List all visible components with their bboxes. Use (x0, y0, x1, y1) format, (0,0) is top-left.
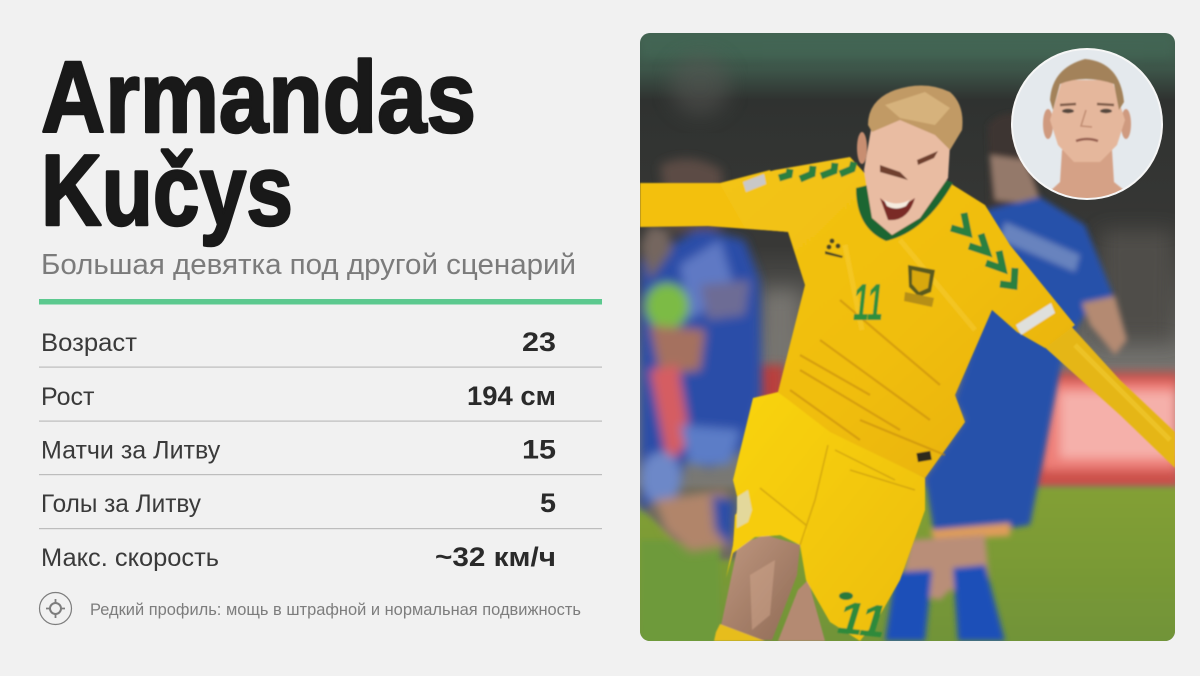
red advertising board (755, 365, 1180, 488)
row: height: 194 см (467, 381, 556, 411)
row: goals for Lithuania: Голы за Литву (41, 490, 201, 518)
row: matches for Lithuania (41, 434, 556, 464)
hummel logo (825, 238, 843, 258)
shorts crest (737, 490, 752, 528)
portrait hair (1050, 59, 1124, 110)
shirt hem label (916, 451, 932, 462)
photo background stands (640, 33, 1175, 641)
title: player name: Kučys (41, 135, 293, 247)
row: height: Рост (41, 383, 95, 411)
panel: match photo (630, 33, 1190, 657)
background player: left (640, 159, 762, 552)
shoulder chevrons (779, 162, 1015, 286)
row: top speed (41, 542, 556, 572)
row: matches for Lithuania: 15 (522, 434, 556, 464)
stats table (39, 327, 602, 572)
left arm (640, 170, 790, 232)
row: age (41, 327, 556, 357)
row: height (41, 381, 556, 411)
pitch (640, 484, 1175, 641)
portrait face (1050, 80, 1125, 162)
legs (714, 535, 825, 641)
shorts (726, 392, 925, 648)
footnote: Редкий профиль: мощь в штрафной и нормальная подвижность (90, 601, 581, 619)
shirt (720, 157, 1075, 478)
background player: right (885, 114, 1127, 641)
main player (640, 85, 1175, 648)
neck and collar (856, 178, 953, 241)
icon: target (40, 592, 72, 624)
head (857, 85, 962, 235)
right arm (1040, 325, 1175, 468)
row: top speed: Макс. скорость (41, 544, 219, 572)
row: goals for Lithuania (41, 488, 556, 518)
crest (904, 265, 935, 307)
portrait ears (1043, 109, 1053, 139)
sleeve badges (743, 174, 766, 192)
row: age: Возраст (41, 329, 138, 357)
row: age: 23 (522, 327, 556, 357)
subtitle: Большая девятка под другой сценарий (41, 249, 576, 281)
title: player name: Armandas (41, 42, 476, 154)
row: top speed: ~32 км/ч (435, 542, 556, 572)
green divider (39, 299, 602, 304)
shorts number 11: 11 (836, 591, 888, 648)
title: player name (41, 42, 476, 247)
inset portrait (1011, 48, 1163, 202)
row: goals for Lithuania: 5 (540, 488, 556, 518)
portrait neck and shoulders (1052, 150, 1123, 198)
shirt number 11: 11 (853, 274, 883, 332)
row: matches for Lithuania: Матчи за Литву (41, 436, 221, 464)
